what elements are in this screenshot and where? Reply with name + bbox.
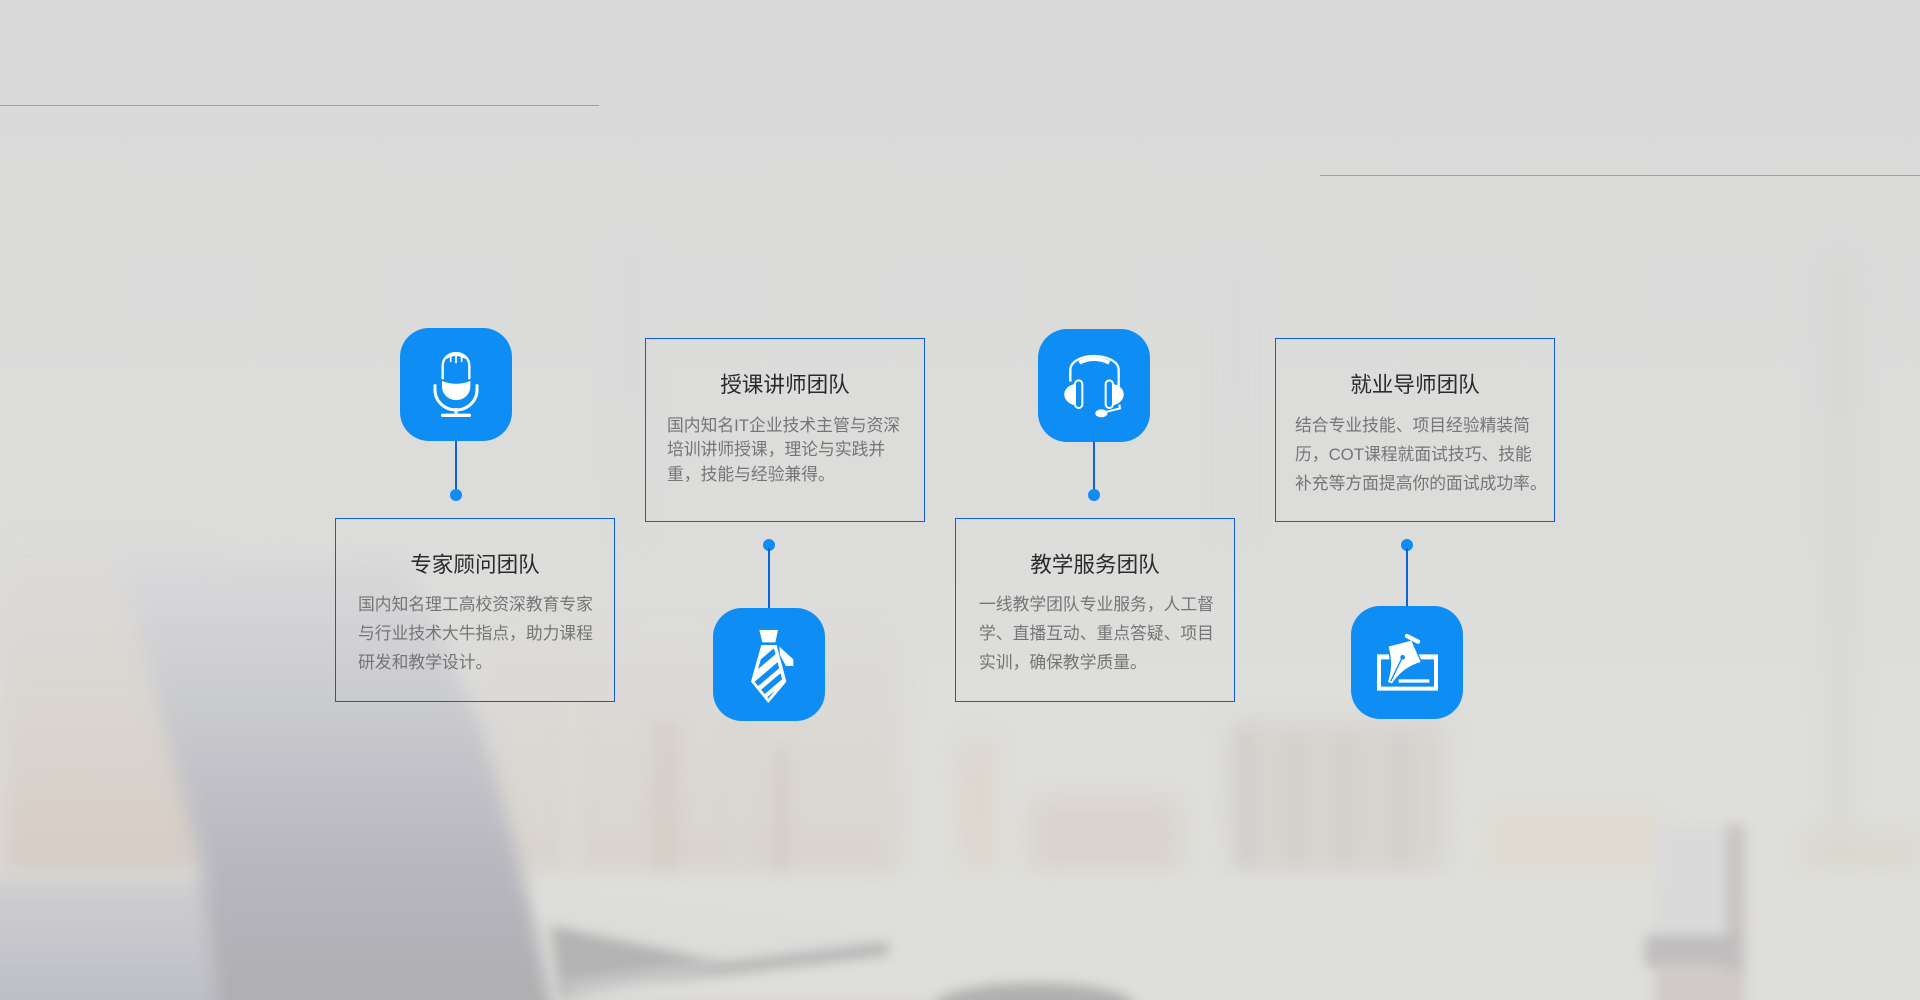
heading: 教学服务团队 xyxy=(1030,552,1160,577)
description: 研发和教学设计。 xyxy=(358,653,492,672)
description: 国内知名理工高校资深教育专家 xyxy=(358,595,593,614)
icon tile: pen xyxy=(1351,606,1463,719)
dot: microphone xyxy=(450,489,462,501)
connector: headset xyxy=(1093,442,1095,493)
description: 结合专业技能、项目经验精装简 xyxy=(1295,416,1530,435)
description: 一线教学团队专业服务，人工督 xyxy=(979,595,1214,614)
description: 国内知名IT企业技术主管与资深 xyxy=(667,416,900,435)
description xyxy=(358,595,593,672)
description: 学、直播互动、重点答疑、项目 xyxy=(979,624,1214,643)
dot: pen xyxy=(1401,539,1413,551)
heading: 专家顾问团队 xyxy=(410,552,540,577)
panel: 授课讲师团队 xyxy=(645,338,925,522)
icon: pen xyxy=(1377,634,1438,691)
panel: 就业导师团队 xyxy=(1275,338,1555,522)
description xyxy=(979,595,1214,672)
description: 培训讲师授课，理论与实践并 xyxy=(667,440,885,459)
connector: pen xyxy=(1406,548,1408,606)
connector: microphone xyxy=(455,441,457,493)
description: 实训，确保教学质量。 xyxy=(979,653,1147,672)
panel: 专家顾问团队 xyxy=(335,518,615,702)
description: 重，技能与经验兼得。 xyxy=(667,465,835,484)
icon: tie xyxy=(751,630,794,703)
dot: tie xyxy=(763,539,775,551)
description: 补充等方面提高你的面试成功率。 xyxy=(1295,474,1547,493)
decorative line: top left xyxy=(0,105,599,106)
description: 历，COT课程就面试技巧、技能 xyxy=(1295,445,1532,464)
icon: microphone xyxy=(434,352,478,417)
heading: 就业导师团队 xyxy=(1350,372,1480,397)
icon tile: headset xyxy=(1038,329,1150,442)
icon: headset xyxy=(1064,354,1124,418)
description xyxy=(667,416,900,484)
description xyxy=(1295,416,1547,493)
panel: 教学服务团队 xyxy=(955,518,1235,702)
icon tile: tie xyxy=(713,608,825,721)
dot: headset xyxy=(1088,489,1100,501)
icon tile: microphone xyxy=(400,328,512,441)
heading: 授课讲师团队 xyxy=(720,372,850,397)
connector: tie xyxy=(768,548,770,608)
description: 与行业技术大牛指点，助力课程 xyxy=(358,624,593,643)
decorative line: top right xyxy=(1320,175,1920,176)
